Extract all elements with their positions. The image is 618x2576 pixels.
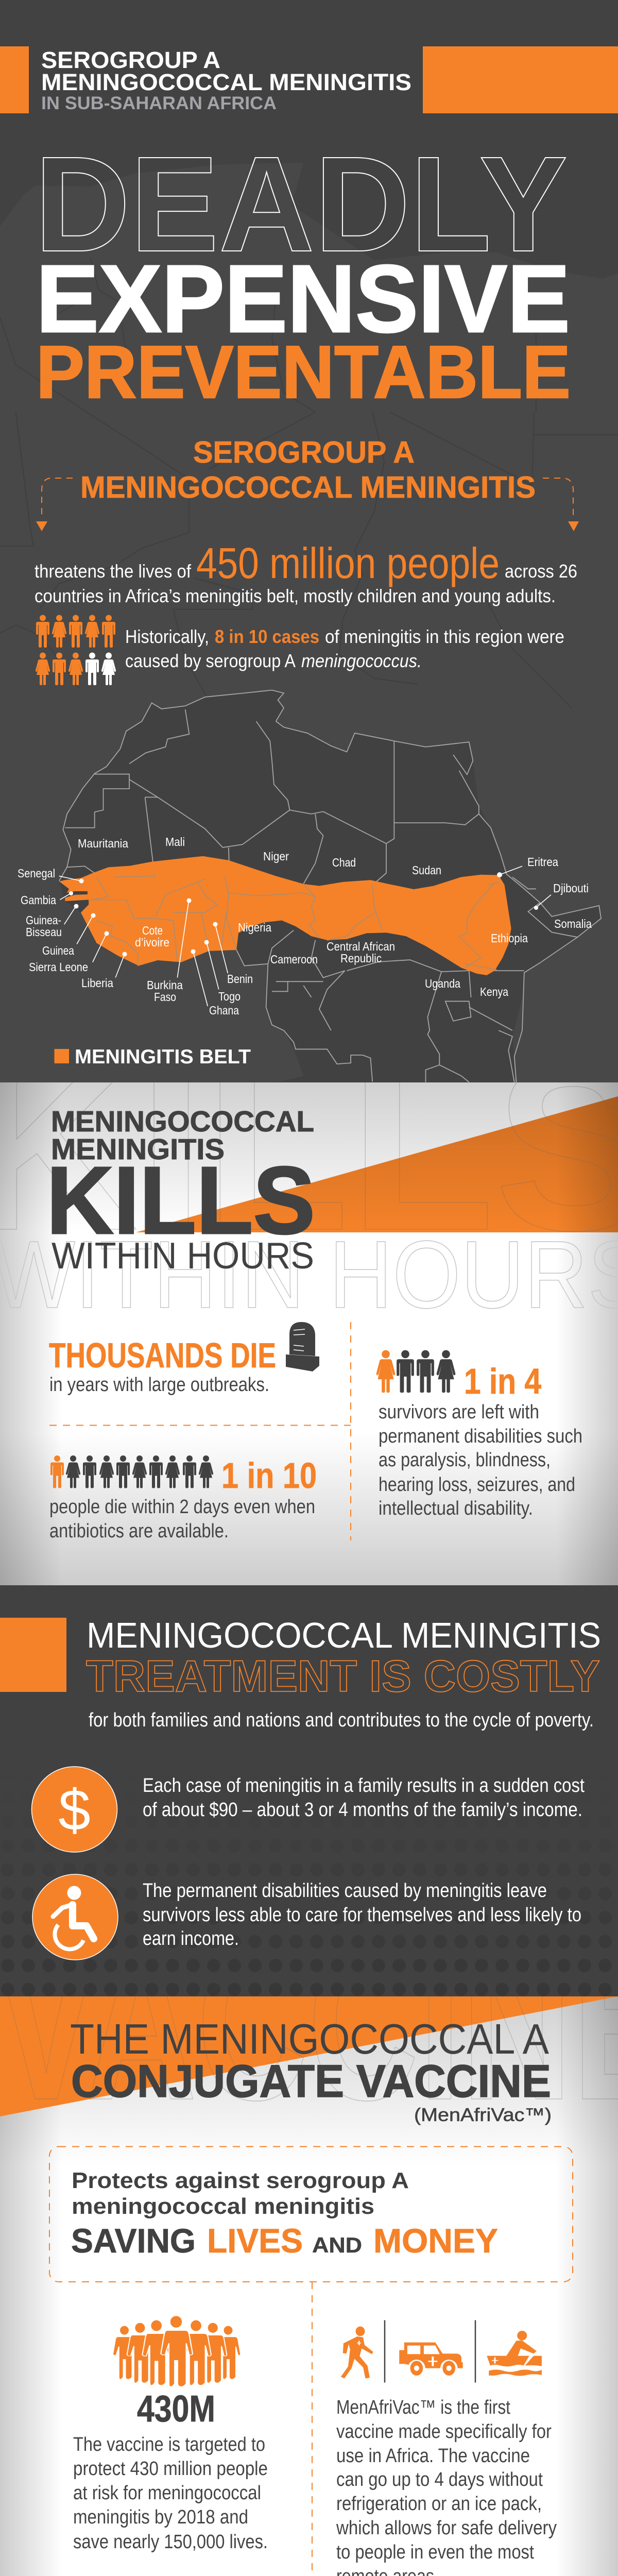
icon: dollar: $	[58, 1778, 91, 1842]
text: permanent disabilities	[143, 1880, 581, 1950]
stat: thousands die: in years with large outbreaks.	[49, 1374, 269, 1396]
callout: saving lives and money: SAVING	[71, 2222, 196, 2260]
block: 430M	[73, 2316, 268, 2553]
orange wedge	[136, 1096, 618, 1232]
text: permanent disabilities: The permanent disabilities caused by meningitis leave	[143, 1880, 547, 1902]
map labels: Bisseau	[26, 925, 62, 939]
heading: meningococcal meningitis kills within hours: MENINGITIS	[51, 1133, 225, 1166]
stat: 1 in 4: as paralysis, blindness,	[379, 1449, 551, 1471]
text: historically 8 in 10 cases	[125, 626, 564, 671]
panel: treatment is costly	[0, 1585, 618, 1996]
map labels: Djibouti	[553, 882, 589, 895]
callout: saving lives and money: Protects against serogroup A	[72, 2168, 409, 2193]
header band	[0, 46, 618, 113]
stat: 1 in 4: intellectual disability.	[379, 1498, 533, 1519]
text: 450 million people	[35, 539, 577, 606]
word: expensive: EXPENSIVE	[36, 246, 570, 352]
map land and borders	[59, 690, 601, 1082]
header line 1: SEROGROUP A	[41, 47, 220, 73]
callout: saving lives and money	[49, 2146, 573, 2282]
stat: 1 in 4: 1 in 4	[464, 1361, 541, 1401]
pointer lines	[59, 866, 551, 1006]
stat: thousands die	[49, 1322, 319, 1396]
header line 2: MENINGOCOCCAL MENINGITIS	[41, 69, 411, 95]
icon: 10 people	[50, 1455, 213, 1488]
pointer dots	[69, 872, 538, 956]
map labels: Mauritania	[78, 837, 128, 850]
map labels: Guinea-	[26, 913, 61, 927]
legend: meningitis belt: MENINGITIS BELT	[75, 1046, 251, 1068]
arrow: right dashed	[543, 478, 579, 531]
block: first vaccine for Africa: can go up to 4 days without	[336, 2469, 543, 2490]
word: deadly: DEADLY	[35, 128, 568, 280]
text: sudden cost	[143, 1775, 585, 1821]
stat: 1 in 10: people die within 2 days even when	[49, 1496, 315, 1518]
orange wedge	[0, 1996, 618, 2116]
map labels: Chad	[332, 856, 356, 869]
subheading: serogroup A: MENINGOCOCCAL MENINGITIS	[80, 470, 536, 504]
heading: conjugate vaccine: CONJUGATE VACCINE	[71, 2055, 551, 2107]
text: 450 million people: threatens the lives of	[35, 561, 192, 582]
heading: meningococcal meningitis: MENINGOCOCCAL MENINGITIS	[87, 1615, 601, 1655]
map labels	[18, 835, 592, 1017]
header accent left	[0, 46, 29, 113]
accent block	[0, 1618, 66, 1692]
icon: walker	[341, 2327, 373, 2379]
map labels: Eritrea	[527, 855, 558, 869]
map labels: Ghana	[209, 1004, 239, 1017]
text: permanent disabilities: earn income.	[143, 1928, 239, 1950]
subheading: serogroup A	[80, 435, 536, 504]
stat: thousands die: THOUSANDS DIE	[49, 1336, 276, 1375]
map labels: Benin	[227, 972, 253, 986]
block: first vaccine for Africa: vaccine made specifically for	[336, 2421, 552, 2443]
callout: saving lives and money: MONEY	[373, 2222, 498, 2260]
stat: 1 in 4: hearing loss, seizures, and	[379, 1474, 575, 1496]
map labels: Ethiopia	[491, 931, 528, 945]
panel: conjugate vaccine	[0, 1996, 618, 2576]
map: meningitis belt	[18, 690, 601, 1082]
map labels: Cameroon	[270, 953, 318, 966]
icon: crowd	[113, 2316, 241, 2387]
map labels: Faso	[154, 990, 176, 1004]
title: deadly expensive preventable	[35, 128, 571, 414]
block: 430M: meningitis by 2018 and	[73, 2506, 248, 2528]
panel: kills within hours	[0, 1082, 618, 1585]
header line 3: IN SUB-SAHARAN AFRICA	[41, 93, 277, 113]
heading: meningococcal meningitis kills within hours: MENINGOCOCCAL	[51, 1105, 314, 1138]
map labels: Somalia	[554, 917, 592, 930]
block: 430M: protect 430 million people	[73, 2458, 268, 2480]
map labels: d’ivoire	[135, 936, 169, 949]
heading: meningococcal meningitis kills within hours	[46, 1105, 315, 1277]
map labels: Mali	[165, 835, 185, 849]
map labels: Cote	[142, 924, 163, 937]
stat: 1 in 4: survivors are left with	[379, 1401, 539, 1423]
text: historically 8 in 10 cases: Historically,	[125, 626, 209, 647]
word: preventable: PREVENTABLE	[36, 330, 571, 414]
map labels: Gambia	[21, 893, 56, 907]
block: first vaccine for Africa	[336, 2320, 557, 2576]
icon: wheelchair	[32, 1874, 118, 1960]
dividers	[49, 1322, 351, 1540]
callout: saving lives and money: meningococcal meningitis	[72, 2194, 374, 2219]
icon: 8 in 10 people	[36, 615, 116, 685]
text: historically 8 in 10 cases: meningococcus.	[301, 650, 422, 671]
map labels: Guinea	[42, 944, 74, 957]
map labels: Burkina	[147, 978, 183, 992]
block: 430M: save nearly 150,000 lives.	[73, 2531, 268, 2553]
callout: saving lives and money: AND	[312, 2233, 362, 2257]
header accent right	[423, 46, 618, 113]
map labels: Togo	[218, 990, 241, 1003]
block: 430M: The vaccine is targeted to	[73, 2434, 265, 2455]
arrow: left dashed	[36, 478, 73, 531]
heading: menafrivac: (MenAfriVac™)	[414, 2104, 552, 2125]
icon: tombstone	[286, 1322, 319, 1371]
stat: 1 in 4	[376, 1350, 582, 1519]
icons: walker, jeep, boat	[341, 2327, 542, 2379]
dividers	[71, 2282, 548, 2576]
heading: the meningococcal A: THE MENINGOCOCCAL A	[70, 2015, 550, 2063]
map labels: Sudan	[412, 863, 441, 877]
text: 450 million people: across 26	[505, 561, 577, 582]
stat: 1 in 10: 1 in 10	[221, 1455, 317, 1496]
text: historically 8 in 10 cases: caused by serogroup A	[125, 650, 296, 671]
panel: intro dark background	[0, 0, 618, 1082]
map labels: Kenya	[480, 985, 508, 998]
callout: saving lives and money: LIVES	[207, 2222, 303, 2260]
text: 450 million people: 450 million people	[196, 539, 500, 587]
subheading: serogroup A: SEROGROUP A	[193, 435, 415, 469]
block: first vaccine for Africa: use in Africa. The vaccine	[336, 2445, 530, 2467]
heading: treatment is costly: TREATMENT IS COSTLY	[86, 1652, 600, 1701]
text: 450 million people: countries in Africa’s meningitis belt, mostly children and young adults.	[35, 585, 556, 606]
map labels: Nigeria	[238, 921, 271, 934]
stat: 1 in 10: antibiotics are available.	[49, 1520, 229, 1542]
icon: 4 people	[376, 1350, 455, 1393]
heading: meningococcal meningitis kills within hours: WITHIN HOURS	[52, 1235, 314, 1277]
map labels: Uganda	[425, 977, 460, 990]
map labels: Republic	[340, 952, 382, 965]
stat: 1 in 4: permanent disabilities such	[379, 1426, 582, 1447]
block: 430M: 430M	[137, 2388, 215, 2430]
map labels: Sierra Leone	[29, 960, 88, 974]
belt region	[59, 856, 511, 975]
map labels: Senegal	[18, 867, 55, 880]
stat: 1 in 10	[49, 1455, 317, 1542]
block: 430M: at risk for meningococcal	[73, 2482, 261, 2504]
icon: boat	[487, 2331, 542, 2376]
block: first vaccine for Africa: MenAfriVac™ is the first	[336, 2397, 510, 2418]
block: first vaccine for Africa: refrigeration or an ice pack,	[336, 2493, 542, 2515]
text: historically 8 in 10 cases: 8 in 10 cases	[215, 626, 319, 647]
icon: jeep	[399, 2343, 463, 2377]
icon: dollar	[32, 1767, 117, 1852]
heading: meningococcal meningitis kills within hours: KILLS	[46, 1147, 315, 1254]
block: first vaccine for Africa: which allows for safe delivery	[336, 2517, 557, 2539]
map labels: Niger	[263, 850, 289, 863]
block: first vaccine for Africa: to people in even the most	[336, 2541, 534, 2563]
text: historically 8 in 10 cases: of meningitis in this region were	[325, 626, 564, 647]
map labels: Central African	[327, 940, 395, 953]
map labels: Liberia	[81, 976, 113, 990]
